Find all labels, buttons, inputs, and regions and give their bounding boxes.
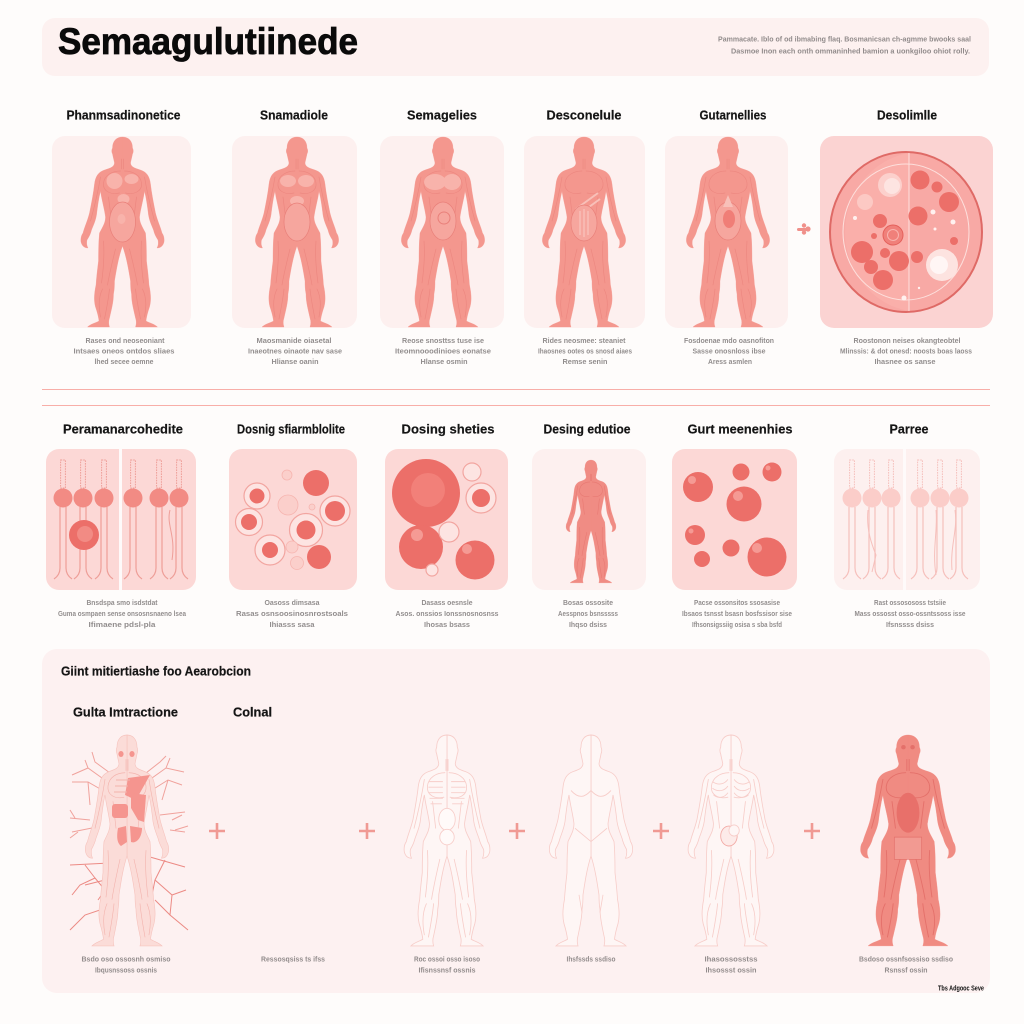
panel: Dosing pharmabolite cells: Rasas osnsoosinosnrostsoals [236,609,348,618]
panel: Desing edutioe body [532,422,646,629]
subheading: Gulta Imtractione: Gulta Imtractione [73,704,178,720]
panel: Peramanarcohedite neurons: Peramanarcohedite [63,422,183,436]
icon: plus [653,823,669,839]
panel: Semagelies body [380,108,504,366]
panel: Gut meenenhies spheres: Gurt meenenhies [688,422,792,436]
panel: Snamadiole body [232,108,357,366]
panel: Dosing sheties cells: Dasass oesnsle [422,598,472,607]
panel: Snamadiole body: Maosmanide oiasetal [256,336,332,345]
panel: Semagelies body: Semagelies [407,108,477,122]
figure: outline body with gut: Ihsossst ossin [706,966,756,974]
panel: Semagelies body: Reose snosttss tuse ise [402,336,484,345]
caption: Colnal: Ressosqsiss ts ifss [261,954,325,964]
header description: Pammacate. Iblo of od ibmabing flaq. Bosmanicsan ch-agmme bwooks saal [718,34,971,44]
icon: plus [509,823,525,839]
panel: Desolimlle cell circle: Ihasnee os sanse [874,357,936,366]
header description: Dasmoe Inon each onth ommaninhed bamion a uonkgiloo ohiot rolly. [731,46,970,56]
icon: plus [804,823,820,839]
panel: Gutarnellies body: Gutarnellies [700,108,766,122]
figure: body with vessels: Ibqusnssoss ossnis [95,966,157,974]
panel: Gutarnellies body [665,108,788,366]
panel: Gutarnellies body: Fosdoenae mdo oasnofiton [684,336,774,345]
panel: Gut meenenhies spheres: Ifhsonsigssiig osisa s sba bsfd [692,620,782,629]
panel: gut interactions for absorption [42,649,990,993]
figure: plain outline body: Ihsfssds ssdiso [566,954,616,964]
panel: Gutarnellies body: Sasse onosnloss ibse [692,346,766,356]
panel: Snamadiole body: Inaeotnes oinaote nav sase [248,346,342,356]
icon: plus [359,823,375,839]
panel: Desing edutioe body: Ihqso dsiss [569,620,607,629]
panel: Dosing pharmabolite cells: Ihiasss sasa [270,620,316,629]
subheading: Colnal: Colnal [233,704,272,720]
panel: Dosing pharmabolite cells [229,422,357,629]
panel: Pharmacokinetics body: lhed secee oemne [94,357,154,366]
figure: body with vessels [70,735,188,974]
figure: outline body with ribs [404,735,490,974]
figure: solid muscle body: Rsnssf ossin [884,966,928,974]
panel: Pharmacokinetics body [52,108,191,366]
panel: Desconelule body: Desconelule [546,108,622,122]
panel: Gut meenenhies spheres [672,422,797,629]
panel: Desconelule body [524,108,645,366]
panel: Desing edutioe body: Desing edutioe [544,422,630,436]
panel: Pharmacokinetics body: Intsaes oneos ontdos sliaes [74,346,174,356]
figure: solid muscle body: Bsdoso ossnfsossiso ssdiso [859,954,954,964]
panel: Peramanarcohedite neurons: Guma osmpaen sense onsosnsnaeno lsea [58,609,187,618]
panel: Desolimlle cell circle: Roostonon neises okangteobtel [854,336,960,345]
panel: Pharmacokinetics body: Phanmsadinonetice [66,108,180,122]
panel heading: Giint mitiertiashe foo Aearobcion [61,664,251,678]
panel: Dosing pharmabolite cells: Dosnig sfiarmblolite [237,422,345,436]
figure: outline body with ribs: Roc ossoi osso isoso [414,954,481,964]
chart: cell cross-section [830,152,982,312]
figure: outline body with gut: Ihasossosstss [704,954,758,964]
panel: Snamadiole body: Snamadiole [260,108,328,122]
panel: Parree neurons [834,422,980,629]
panel: Peramanarcohedite neurons: Ifimaene pdsl-pla [88,620,157,629]
panel: Gut meenenhies spheres: Pacse ossonsitos ssosasise [694,598,780,607]
panel: Parree neurons: Ifsnssss dsiss [886,620,934,629]
figure: outline body with ribs: Ifisnssnsf ossnis [418,966,476,974]
section dividers [42,389,990,406]
panel: Gutarnellies body: Aress asmlen [708,357,752,366]
figure: solid muscle body [859,735,955,974]
panel: Semagelies body: Iteomnooodinioes eonatse [395,346,491,356]
panel: Dosing sheties cells: Ihosas bsass [424,620,470,629]
header description [718,34,971,56]
icon: small connector arrow [797,223,811,235]
panel: Parree neurons: Parree [890,422,928,436]
panel: Semagelies body: Hlanse osmin [420,357,468,366]
footer note: Tbs Adgooc Seve [938,986,984,992]
panel: Dosing pharmabolite cells: Oasoss dimsasa [264,598,320,607]
panel: Peramanarcohedite neurons: Bnsdspa smo isdstdat [86,598,158,607]
title: Semaagulutiinede [58,21,358,62]
panel: Desing edutioe body: Aesspnos bsnsssss [558,609,618,618]
panel: Dosing sheties cells: Asos. onssios Ionssnosnosnss [396,609,498,618]
panel: Desolimlle cell circle [820,108,993,366]
figure: plain outline body [549,735,633,964]
panel: Desconelule body: Rides neosmee: steaniet [542,336,626,345]
figure: body with vessels: Bsdo oso ossosnh osmiso [82,954,171,964]
panel: Desconelule body: Remse senin [562,357,608,366]
panel: Desing edutioe body: Bosas ossosite [563,598,613,607]
panel: Snamadiole body: Hlianse oanin [272,357,318,366]
panel: Dosing sheties cells [385,422,508,629]
panel: Desolimlle cell circle: Mlinssis: & dot onesd: noosts boas laoss [840,346,972,356]
panel: Pharmacokinetics body: Rases ond neoseoniant [86,336,165,345]
panel: Parree neurons: Mass ossosst osso-ossntssoss isse [854,609,966,618]
panel: Parree neurons: Rast ossosososs tstsiie [874,598,946,607]
panel: Desconelule body: Ihaosnes ootes os snosd aiaes [538,346,632,356]
panel: Peramanarcohedite neurons [46,422,196,629]
panel: Desolimlle cell circle: Desolimlle [877,108,937,122]
header banner [42,18,989,76]
panel: Gut meenenhies spheres: Ibsaos tsnsst bsasn bosfssisor sise [682,609,792,618]
panel: Dosing sheties cells: Dosing sheties [402,422,494,436]
figure: outline body with gut [688,735,774,974]
icon: plus [209,823,225,839]
